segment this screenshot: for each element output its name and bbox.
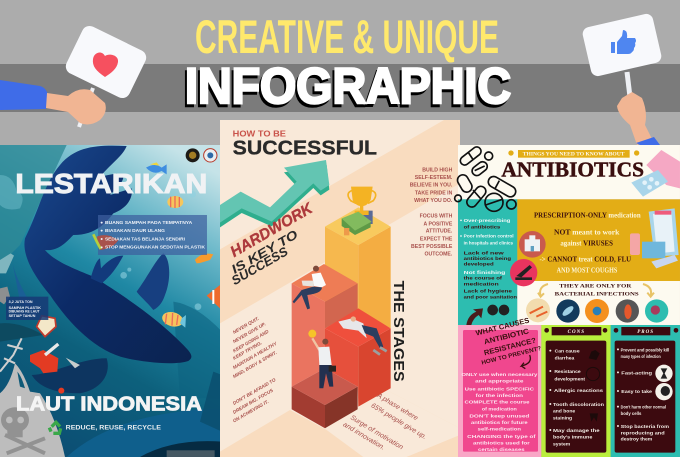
text: self-esteem advice: WHAT YOU DO. <box>414 198 453 204</box>
whale <box>24 146 191 363</box>
heading: cons: CONS <box>568 330 585 335</box>
trophy <box>348 187 376 224</box>
fish skeleton <box>0 338 23 372</box>
pills outlines <box>455 145 518 211</box>
heading: successful: SUCCESSFUL <box>233 136 377 159</box>
heading: Lestarikan: LESTARIKAN <box>15 168 207 199</box>
plastic bottle <box>0 253 14 273</box>
text: prevention list: CHANGING the type of <box>467 434 536 440</box>
heading: what causes resistance: ANTIBIOTIC <box>483 326 531 346</box>
title: creative and unique: CREATIVE & UNIQUE <box>195 10 499 63</box>
panel: pros list: destroy them <box>621 437 652 442</box>
text: self-esteem advice: BEST POSSIBLE <box>411 244 453 250</box>
text: causes list: Over-prescribing <box>464 218 510 224</box>
box: plastic waste statistic: SAMPAH PLASTIK <box>9 306 41 310</box>
text: prescription: NOT meant to work <box>554 227 620 236</box>
panel: cons list: Allergic reactions <box>554 388 603 394</box>
box: actions list: STOP MENGGUNAKAN SEDOTAN PLASTIK <box>105 245 205 251</box>
icon: recycle <box>49 422 61 433</box>
panel: resistance, cons and pros <box>458 316 680 457</box>
heading: Laut Indonesia: LAUT INDONESIA <box>16 394 202 416</box>
heading: antibiotics: ANTIBIOTICS <box>501 160 644 182</box>
heading: what causes resistance: RESISTANCE? <box>483 336 537 357</box>
plastic bag with skull <box>0 363 65 457</box>
panel: pros list: many types of infection <box>621 354 661 359</box>
apple core <box>37 316 56 337</box>
text: prevention list: COMPLETE the course <box>464 400 530 406</box>
text: prescription <box>534 210 641 275</box>
panel: cons list: Tooth discoloration <box>553 402 604 408</box>
person with lightbulb <box>308 330 336 388</box>
box: actions list: BUANG SAMPAH PADA TEMPATNYA <box>105 220 193 226</box>
panel: How to be successful <box>220 120 460 457</box>
credit <box>167 450 215 457</box>
background band <box>0 64 680 112</box>
text: stage descriptions: and innovation. <box>342 421 386 452</box>
text: prevention list: and appropriate <box>475 379 524 385</box>
panel: cons list: body's immune <box>553 435 593 441</box>
heading: how to be: HOW TO BE <box>233 130 287 139</box>
text: bacterial heading: BACTERIAL INFECTIONS <box>555 292 639 298</box>
text: prescription: against VIRUSES <box>560 238 613 247</box>
text: bacterial heading <box>555 284 639 298</box>
coral silhouettes <box>140 441 222 457</box>
heading: pros <box>614 327 678 335</box>
text: stage descriptions: 65% people give up. <box>370 402 428 441</box>
heading: what causes resistance: WHAT CAUSES <box>475 316 530 338</box>
box: plastic waste statistic: DIBUANG KE LAUT <box>9 310 40 314</box>
heading: what causes resistance <box>475 316 542 367</box>
red cap <box>58 388 64 394</box>
panel: pros list: Don't harm other normal <box>621 405 666 410</box>
panel: cons list: Resistance <box>554 369 581 375</box>
panel: pros list: body cells <box>621 411 642 416</box>
icon: clipboard and medicine <box>630 208 679 268</box>
panel: cons list: system <box>553 441 571 447</box>
panel: Antibiotics <box>455 145 680 325</box>
red can <box>30 350 58 373</box>
icon: curved arrow <box>521 355 530 369</box>
panel: pros list <box>615 341 675 453</box>
box: plastic waste statistic: SETIAP TAHUN <box>9 314 36 318</box>
text: never quit advice: KEEP TRYING. <box>232 340 263 361</box>
text: causes list: Lack of new <box>464 250 505 255</box>
text: prevention list: antibiotics used for <box>473 441 530 447</box>
text: causes list: Not finishing <box>464 270 505 276</box>
text: causes list: developed <box>464 262 494 267</box>
text: never quit advice: MIND, BODY & SPIRIT. <box>232 350 278 379</box>
text: prevention list: DON'T keep unused <box>469 413 529 419</box>
text: self-esteem advice: TAKE PRIDE IN <box>415 190 453 196</box>
person lying down <box>338 316 387 355</box>
text: prescription: AND MOST COUGHS <box>557 266 617 275</box>
left turtle fin <box>13 263 38 318</box>
bubbles <box>120 191 201 310</box>
panel: pros list: reproducing and <box>621 430 665 435</box>
text: prevention list: for the infection <box>476 393 523 399</box>
dark fish tail at the bottom <box>32 358 108 393</box>
panel: cons list <box>546 341 606 453</box>
small red debris behind the list <box>97 235 118 250</box>
text: causes list: and poor sanitation <box>464 294 517 299</box>
subtitle bar <box>508 150 639 158</box>
title: infographic: INFOGRAPHIC <box>185 58 511 114</box>
panel: pros list: Fast-acting <box>621 370 652 376</box>
text: self-esteem advice: FOCUS WITH <box>420 214 453 220</box>
text: prescription: -> CANNOT treat COLD, FLU <box>539 255 632 264</box>
heading: the stages: THE STAGES <box>390 281 406 382</box>
text: self-esteem advice: EXPECT THE <box>420 236 453 242</box>
heading: success: SUCCESS <box>229 244 291 288</box>
heading: hardwork: HARDWORK <box>227 200 316 261</box>
text: stage descriptions: A phase where <box>375 392 419 422</box>
bacteria icons <box>526 298 668 323</box>
subtitle bar: THINGS YOU NEED TO KNOW ABOUT <box>523 152 625 158</box>
text: bacterial heading: THEY ARE ONLY FOR <box>559 284 632 290</box>
text: self-esteem advice: ATTITUDE. <box>426 229 453 235</box>
box: actions list: BIASAKAN DAUR ULANG <box>105 228 165 234</box>
text: causes list: the course of <box>464 276 503 281</box>
panel: pros list: Easy to take <box>621 389 652 395</box>
panel: cons list: Can cause <box>555 349 580 355</box>
text: never quit advice <box>232 316 278 424</box>
text: never quit advice: DON'T BE AFRAID TO <box>232 377 277 406</box>
icon: upward arrow <box>466 308 483 325</box>
badges <box>186 148 217 162</box>
text: self-esteem advice: OUTCOME. <box>425 252 453 258</box>
text: stage descriptions <box>342 392 428 452</box>
text: prevention list: antibiotics for future <box>471 420 528 426</box>
text: never quit advice: ON ACHIEVING IT. <box>232 399 270 424</box>
text: self-esteem advice: BUILD HIGH <box>422 167 453 173</box>
text: causes list: of antibiotics <box>464 224 501 229</box>
text: self-esteem advice <box>410 167 453 258</box>
panel: cons list: staining <box>553 416 572 422</box>
heading: pros: PROS <box>637 330 654 335</box>
panel: cons list: May damage the <box>553 428 600 434</box>
panel: pros list: Prevent and possibly kill <box>621 347 669 352</box>
text: prevention list <box>461 372 538 453</box>
isometric stairs <box>292 207 391 428</box>
text: self-esteem advice: A POSITIVE <box>424 221 453 227</box>
panel: pros list: Stop bacteria from <box>621 424 669 429</box>
left hand holding heart sign <box>0 23 149 127</box>
rock <box>0 287 10 304</box>
panel: cons list: diarrhea <box>555 356 575 362</box>
text: causes list: antibiotics being <box>464 256 511 261</box>
text: stage descriptions: Surge of motivation <box>349 414 404 451</box>
panel: Lestarikan poster <box>0 145 222 457</box>
text: prevention list: certain diseases <box>478 447 525 453</box>
text: causes list: medication <box>464 281 499 286</box>
text: prevention list: of medication <box>482 407 517 413</box>
text: prevention list: self-medication <box>478 427 521 433</box>
icon: blister pack <box>631 150 680 197</box>
box: actions list: SEDIAKAN TAS BELANJA SENDIRI <box>105 236 186 242</box>
title: infographic: INFOGRAPHIC <box>183 61 509 117</box>
text: causes list: Poor infection control <box>464 234 514 239</box>
heading: is key to: IS KEY TO <box>229 227 300 277</box>
icon: curved arrows <box>538 284 654 297</box>
text: prevention list: ONLY use when necessary <box>461 372 538 378</box>
tagline: REDUCE, REUSE, RECYCLE <box>66 425 162 432</box>
text: never quit advice: MAINTAIN A HEALTHY <box>232 341 278 370</box>
person with laptop <box>293 266 326 309</box>
small fish bones <box>66 358 80 368</box>
colourful fish <box>146 162 220 329</box>
icon: microscope <box>510 259 537 286</box>
bone <box>45 344 58 355</box>
text: never quit advice: NEVER QUIT. <box>232 316 260 335</box>
right hand holding thumbs-up sign <box>581 13 663 145</box>
box: actions list <box>93 215 207 255</box>
text: causes list <box>460 218 517 299</box>
box: plastic waste statistic: 3,2 JUTA TON <box>9 300 33 304</box>
text: prescription: PRESCRIPTION-ONLY medication <box>534 210 641 219</box>
text: never quit advice: NEVER GIVE UP. <box>232 321 267 344</box>
growth arrow <box>220 160 329 227</box>
money stack <box>342 212 372 235</box>
panel: cons list: and bone <box>553 409 575 415</box>
text: never quit advice: DREAM BIG. FOCUS <box>232 387 275 415</box>
heading: what causes resistance: HOW TO PREVENT? <box>481 346 542 367</box>
panel: cons list: development <box>554 376 585 382</box>
heading: cons <box>544 327 607 335</box>
text: causes list: Lack of hygiene <box>464 289 513 294</box>
text: never quit advice: KEEP GOING AND <box>232 329 270 354</box>
text: self-esteem advice: SELF-ESTEEM. <box>415 175 453 181</box>
text: prevention list: Use antibiotic SPECIFIC <box>465 386 534 392</box>
icon: hands and germs <box>487 305 509 315</box>
text: causes list: in hospitals and clinics <box>464 241 514 246</box>
icon: hospital <box>519 231 546 258</box>
box: plastic waste statistic <box>6 297 48 320</box>
text: self-esteem advice: BELIEVE IN YOU. <box>410 183 453 189</box>
